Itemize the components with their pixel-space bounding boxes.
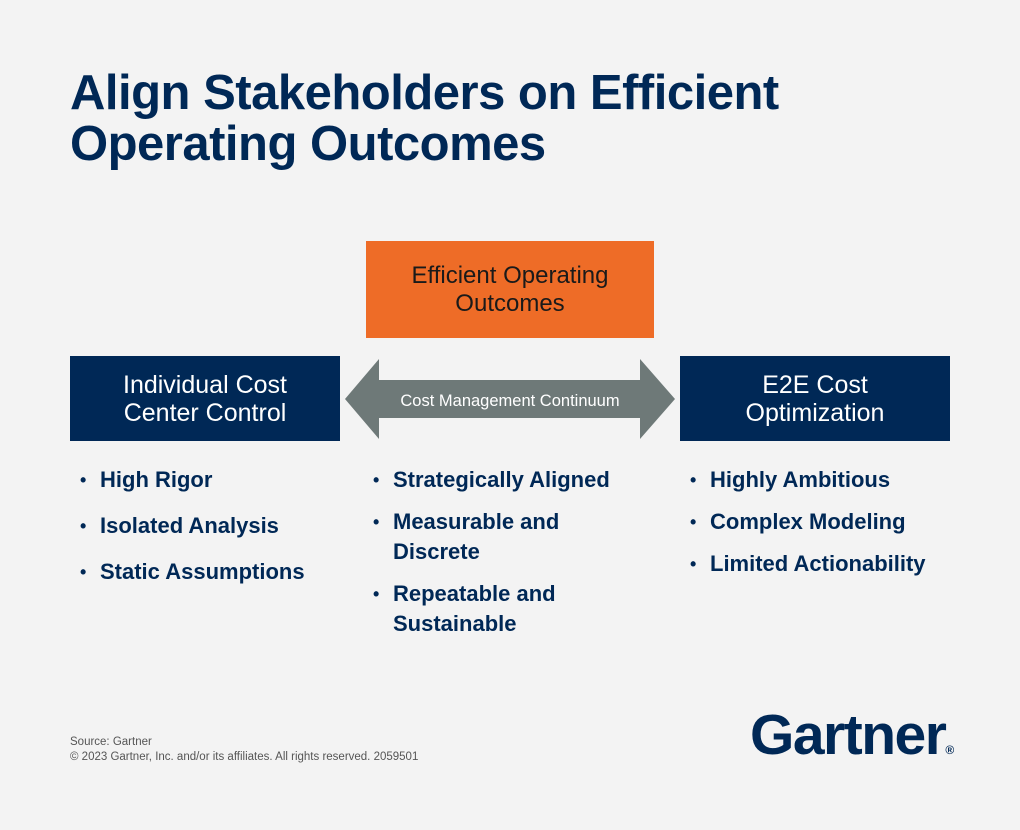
right bullets: Complex Modeling: [710, 509, 906, 534]
right box: E2E Cost: [762, 370, 868, 398]
middle bullets: Discrete: [393, 539, 480, 564]
source text: [70, 736, 418, 763]
left bullets: [80, 467, 305, 584]
title: Align Stakeholders on Efficient: [70, 66, 779, 120]
left box: Individual Cost: [123, 370, 287, 398]
logo: Gartner: Gartner®: [750, 703, 954, 767]
right box: [680, 356, 950, 441]
left bullets: Isolated Analysis: [100, 513, 279, 538]
middle bullets: [374, 467, 610, 636]
right bullets: Highly Ambitious: [710, 467, 890, 492]
orange box: efficient operating outcomes: [366, 241, 654, 338]
middle bullets: Repeatable and: [393, 581, 556, 606]
left box: [70, 356, 340, 441]
left bullets: Static Assumptions: [100, 559, 305, 584]
orange box: efficient operating outcomes: Outcomes: [455, 290, 565, 316]
title: Operating Outcomes: [70, 117, 546, 171]
arrow: cost management continuum: Cost Management Continuum: [400, 392, 620, 410]
middle bullets: Measurable and: [393, 509, 559, 534]
left box: Center Control: [124, 398, 286, 426]
right box: Optimization: [746, 398, 884, 426]
source text: Source: Gartner: [70, 736, 152, 748]
orange box: efficient operating outcomes: Efficient Operating: [411, 262, 608, 288]
title: [70, 66, 779, 171]
middle bullets: Strategically Aligned: [393, 467, 610, 492]
left bullets: High Rigor: [100, 467, 212, 492]
source text: © 2023 Gartner, Inc. and/or its affiliates. All rights reserved. 2059501: [70, 751, 418, 763]
right bullets: [690, 467, 926, 576]
middle bullets: Sustainable: [393, 611, 516, 636]
right bullets: Limited Actionability: [710, 551, 926, 576]
